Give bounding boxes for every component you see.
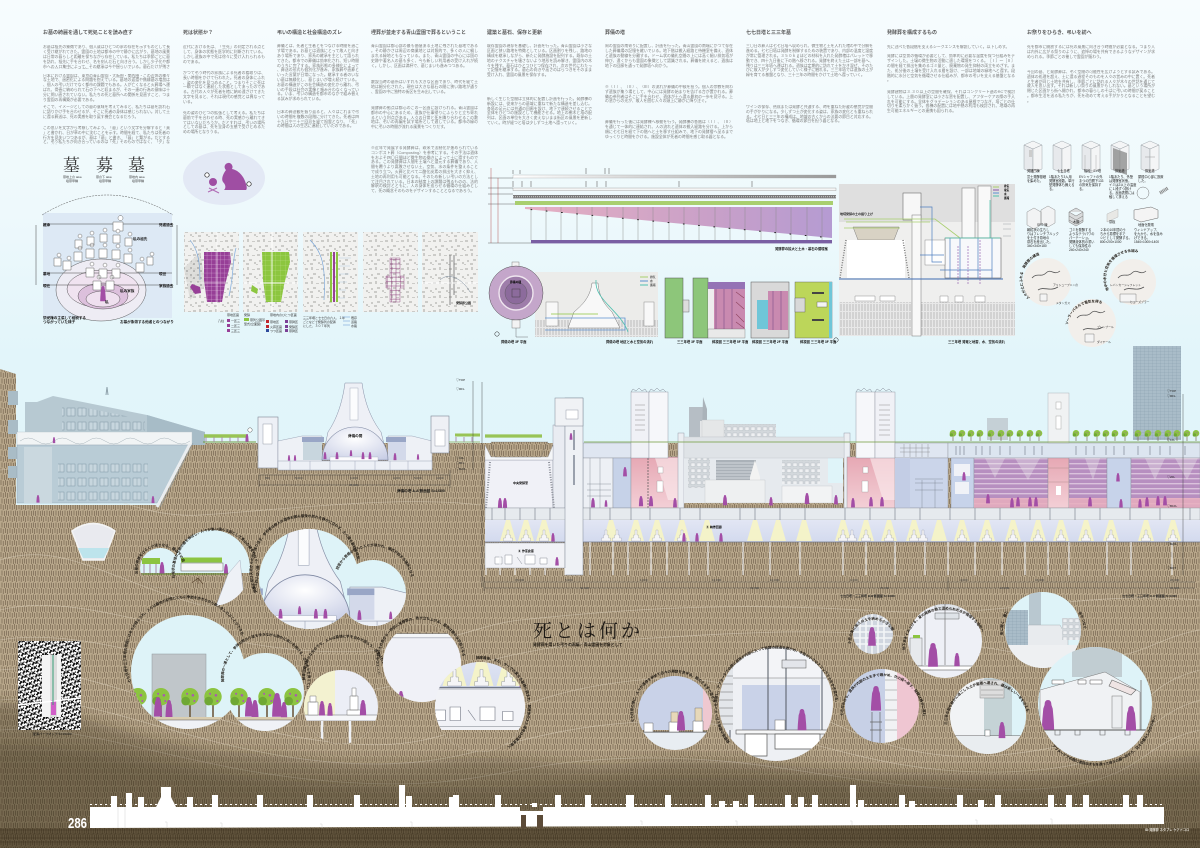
vignette circle 3-4: dome hall: 控室から葬儀の間へと人々が導かれ、儀式が始まる場所となる — [336, 543, 414, 577]
text column: tower of funeral: 周の霊園の南寄りに配置し、計画を行った。青山霊園の南端にかつて存在した葬儀場の記憶を継いでいる。地下階は搬入経路と待機室を備え、遺体と遺族の動線を分離する。ドーム状の儀礼空間の上には高く細い排気塔が伸び、遠くからも霊園の象徴として認識される。葬儀を終えると、遺族は地下の回廊を通って発酵塔へ向かう。 — [605, 44, 733, 68]
vignette circle 5-6: trees and figures: 発酵葬の一連として、参拝の際の小径を歩きながら静かに弔いを続ける。土は木々を育てていく — [220, 632, 311, 689]
section: water and underground flow: 地域発酵の土の掘り上げ — [840, 211, 873, 216]
text column: tower of funeral: 葬儀の塔 — [605, 30, 625, 36]
section: funeral tower: 4,000 — [393, 476, 401, 480]
left: existing building and glass canopy — [8, 387, 205, 507]
main long section: ▽BOT — [1167, 566, 1176, 570]
component icons: tower types: は発酵室状態。 — [1109, 178, 1131, 183]
map legends: 墓地区画 — [227, 312, 239, 317]
map legends: 墓列公園帯 — [250, 317, 265, 322]
section: funeral tower: 45,000 — [349, 483, 359, 487]
vignette circle 5-6: trees and figures: 七七日塔や三三年塔の周囲には木々が植えられ、人々は墓地の記憶とともに季節を歩きながら故人をしのぶことができる。 — [123, 595, 244, 683]
text column: mourning and society: 弔いの構造と社会構造のズレ — [277, 30, 342, 36]
component icons: tower types: した。 — [1138, 178, 1148, 183]
component icons: tower types: 富士発酵基礎 — [1027, 174, 1047, 179]
detail circles: component sketches: ヒューズブラー — [1130, 300, 1150, 304]
vignette circle 1-2: pergola and garden — [134, 528, 260, 606]
detail circles: component sketches — [1019, 248, 1156, 347]
subtitle: 発酵葬を用いた弔りの再編／青山霊園を対象として — [533, 642, 622, 647]
component icons: tower types: を集めた。 — [1027, 178, 1043, 183]
main long section: ▽B1FL — [1167, 504, 1178, 508]
main long section: 1,000 — [640, 578, 648, 582]
text column: open the festival — [1027, 29, 1155, 103]
component icons: tower types: る。 — [1079, 186, 1085, 191]
section: water and underground flow — [839, 184, 1015, 344]
concentric relationship diagram — [36, 195, 177, 324]
main long section: 七七日塔・三三年塔 C-C'断面図 S=1/300 — [1122, 593, 1177, 598]
map legends: 既存 — [351, 315, 357, 320]
text column: 49 days and 33 years: 三〇日の葬人は七七日塔へ収められ、微生物と土を入れた棺の中で分解を進める。七七日塔は発酵を制御するための装置であり、内部の温度と湿度が常に管理される。３５０ｋｇほどの材料を入れた発酵棺はパレットで移動でき、四十九日後に下の階へ移される。発酵を終えた土は一部を墓へ、残りは三三年塔へ運ばれる。遺族は定期的に訪れて土をかき混ぜ、そのたびに故人が少しずつ変化していく様子に触れる。三三年塔では遺族の土が緑を育てる基盤となり、三十三年の時間をかけて土地へ還っていく。 — [746, 44, 873, 77]
main long section: 中央発酵室 — [513, 480, 528, 485]
main long section: ▽1FL — [1167, 438, 1176, 442]
plan: thirty-three year tower — [751, 282, 789, 344]
section: funeral tower: 5,000 — [414, 476, 422, 480]
detail circles: component sketches: ダイヤール — [1097, 340, 1111, 344]
component icons: parts: 朝粒状の生ちし — [1027, 227, 1049, 232]
map legends: 火葬区画 — [270, 324, 282, 329]
component icons: parts: SPS 棟 — [1037, 222, 1048, 227]
plan: lime tower floor — [795, 282, 838, 344]
bottom strip of tower elevations — [90, 785, 1164, 828]
key plan: 配置ハーフマップ S=1/1000 — [33, 731, 72, 736]
concentric relationship diagram: 死者過去 — [159, 222, 174, 227]
text column: architecture and graves: 建築と墓石、保存と更新 — [487, 30, 542, 36]
text column: what forms fermentation burial — [887, 29, 1015, 113]
component icons: parts: 木棚 — [1073, 219, 1079, 224]
component icons: tower types: まつの四層下133 — [1079, 178, 1104, 183]
section: funeral tower: 5,000 — [295, 476, 303, 480]
concentric relationship diagram: 私の祖先 — [133, 236, 148, 241]
main long section: 36,000 — [1170, 586, 1180, 590]
detail circles: component sketches: メタンガス — [1056, 301, 1070, 305]
concentric relationship diagram: お墓が象徴する他者とのつながり — [120, 319, 174, 324]
plan: forty-nine day tower: 斜視図 三三年塔 5F 平面 — [712, 339, 749, 344]
tower airflow section: 排気 — [650, 275, 656, 279]
text column: burial at Aoyama: 青山霊園は都心部の最も価値ある土地に残された墓地である。その静かさは周辺の商業地とは対照的で、多くの人に親しまれる緑地ともなっている。また、青山霊園の中心には国の史跡や著名人の墓も多く、今も新しい利用者の受け入れが続く。しかし、区画は満杯で、墓じまいも進みつつある。 — [371, 44, 478, 68]
text column: is death a state: 死は状態か？ — [183, 30, 213, 36]
vignette circle 8: courtyard: ①・②の中庭の土の底から一時的に発酵葬の、熱が立ち上がる。墓地は静かな中庭となる — [376, 616, 466, 674]
section: water and underground flow: 電気 — [1004, 188, 1010, 192]
kanji comparison — [63, 156, 145, 183]
footer credit: ID:発酵葬 ネタブレ ケアドコロ — [1145, 827, 1189, 832]
section: funeral tower: 6,000 — [350, 476, 358, 480]
component icons: tower types: る。反面表層には — [1109, 190, 1135, 195]
text column: is death a state: 近代における死は、「生死」の判定される点として、身体の状態を医学的に判断されている。しかし遺族の中で死は徐々に受け入れられるものである。 — [183, 45, 265, 64]
pergola on ground — [203, 428, 256, 442]
text column: what forms fermentation burial: 発酵建物は３.３０以上の空間を確保、それはコンクリート造のRCで検討している。上層の発酵室には小さな窓を配置し、アフターケアの際の手入れを可能にする。全体をグラデーションのある屋根でつなぎ、塔ごとの仕切りを柔らかく扱う。各棟の配置には地中熱の利用も検討され、地域の再生可能エネルギーとの連携も図られる。 — [887, 90, 1015, 113]
kanji comparison: 墓 — [128, 156, 145, 175]
vignette circle 15: person at wall: 三三年の間を静かに過ごした土が墓標へ還され、墓は新しい一年を迎える — [944, 681, 1030, 725]
text column: 49 days and 33 years: ワインの保存、熟成または発酵と共通する、時を重ねた貯蔵の感覚が空間の手がかりになる。少しずつ土が変化する姿は、家族の変化とも重ねられる。七七日と三三年の構成は、地域の古くからの法要の節目と対応する。塔は地上と地下をつなぎ、循環の節目を担う器となる。 — [746, 105, 873, 123]
page number: 286 — [68, 815, 87, 832]
tower airflow section: 葬儀の塔 地区と水と空気の流れ — [606, 339, 654, 344]
main long section: 26,000 — [1170, 578, 1180, 582]
component icons: tower types: 型発酵体も備える — [1049, 182, 1074, 187]
map legends: にした、３０７年列 — [303, 323, 330, 328]
main long section: ▽B2FL — [1167, 542, 1178, 546]
component icons: parts: ちから墓標を手で — [1100, 231, 1126, 236]
component icons: parts: 発酵液体的の重い — [1069, 239, 1094, 244]
component icons: parts: ２本の10年間のう — [1100, 227, 1126, 232]
map legends — [218, 312, 357, 333]
text column: tower of funeral: ※（Ⅰ）、（Ⅱ）、（Ⅲ）の流れが葬儀の中核を担う。個人の宗教を問わず遺族が集う場として、中心には発酵の始まりを告げる台が置かれる。葬儀の参列者はそこに手を合わせ、遺体が土へ還る最初の一歩を見守る。上の窓からの光が、故人を囲む人々の頭上に静かに降り注ぐ。 — [605, 85, 733, 103]
component icons: tower types: 屋根中心部に設置 — [1138, 174, 1164, 179]
dimension marks near tower: ▽B2FL — [456, 467, 467, 471]
underground reservoir — [72, 524, 115, 560]
text column: tower of funeral — [605, 29, 733, 139]
vignette circle 1-2: pergola and garden: 石棺状の基壇から藤の棚を伸ばし、人々が集い語らう庭として青山の縁をつなぐ、憩いの小径となる — [171, 528, 260, 590]
map 5: 発酵葬公園 — [456, 300, 471, 305]
text column: grave and death places: お墓の綺麗を通して死処ことを読み直す — [43, 30, 133, 36]
component icons: parts: 墓石を産出した。 — [1027, 239, 1052, 244]
detail circles: component sketches: アリシュープニンの — [1053, 283, 1078, 287]
map legends: 一区三 — [231, 319, 240, 323]
section: water and underground flow: 循環 — [1004, 196, 1010, 200]
map legends: 墓地内のひとつ区画 — [270, 312, 297, 317]
component icons: tower types: 七七日塔 — [1057, 168, 1071, 173]
text column: architecture and graves: 既存霊園の現存を基礎し、計画を行った。青山霊園は小さな区画と狭い路地を特徴としている。区画割りを残し、路地の構成を継承しながら、新たに発酵施設を配列する。既存の土地のテクスチャを壊さないよう地形を読み解き、霊園内の木々を残す。墓石はひとつひとつ保存され、次の世代にわたって記憶を継承する。墓石の向きや高さのばらつきをそのまま受け入れ、霊園の風景を保存する。 — [487, 44, 592, 77]
dimension marks near tower: ▽RFL — [456, 387, 465, 391]
illustration: mourner and skull — [183, 151, 265, 205]
component icons: parts: 340×340×180 — [1027, 244, 1047, 248]
kanji comparison: 墳墓甲種 — [99, 178, 111, 183]
text column: grave and death places: 日本における霊園は、東京の青山霊園・大阪府・関西圏・この近郊の様々な土地で、過密化による問題を抱えている。墓地の返還や無縁墓の増加は、個人の弔いだけでなく都市の課題でもある。人が亡くなると火葬場へ運ばれ、骨壺に納められて石の下へと収まるが、その一連の行為の意味は十分に問い直されていない。私たちの死と墓所への関係を見直すこと、つまり霊園の再構築が必要である。 — [43, 74, 170, 102]
text column: is death a state: かつて弔う時代の家族による死者の看取りは、長い時間をかけて行われた。死者の身体にふれ、姿の変化を見つめること。つまりそこに死は一瞬ではなく連続した状態としてあったのである。古代の人々が死者を棺に納め遠ざけてきた文字を見ると、それは現代の感覚とは異なっている。 — [183, 71, 265, 104]
vignette circle 13: shelf wall: 小窓の奥に故人の土を納める小さな棚 — [848, 616, 894, 644]
main long section: 10,000 — [770, 578, 780, 582]
main long section: 七七日塔・三三年塔 B-B'断面図 S=1/300 — [840, 593, 895, 598]
component icons: parts: りはフレンチブルック — [1027, 231, 1059, 236]
section: funeral tower: 4,000 — [436, 476, 444, 480]
tower plan circle — [489, 262, 543, 344]
map legends: 三三年塔と七七日の六人、１年 — [303, 315, 345, 320]
main long section: 16,000 — [1000, 586, 1010, 590]
vignette circle 16: skyline — [1000, 592, 1087, 668]
component icons: parts: 地面化発電 — [1138, 222, 1155, 227]
concentric relationship diagram: つながっていた様子 — [43, 319, 76, 324]
map legends: 三区三 — [231, 329, 240, 333]
component icons: tower types: 1階あたり3人用 — [1049, 174, 1072, 179]
vignette circle 8: courtyard — [376, 616, 466, 702]
main long section: 27,000 — [880, 586, 890, 590]
component icons: tower types: 1階あたり、外壁 — [1109, 174, 1134, 179]
vignette circle 14: mechanical room: 地下水をくみ上げる。夏の発酵の熱で温められた水が循環する場所へ — [902, 606, 983, 650]
text column: burial at Aoyama: 敷設当時の墓所はいずれも大きな区画であり、時代を経て土地は細分化された。現在は大きな墓石の間に狭い路地が通り、霊園の中に独特の街区を生み出している。 — [371, 80, 478, 94]
component icons: parts — [1027, 187, 1168, 252]
concentric relationship diagram: 墓地 — [43, 271, 51, 276]
text column: what forms fermentation burial: 発酵葬を構成するもの — [887, 30, 937, 36]
kanji comparison: 墓地内 taka — [129, 174, 145, 179]
vignette circle 17: facades — [1038, 647, 1156, 766]
vignette circle 14: mechanical room — [902, 604, 983, 678]
timeline diagram: tower expansion — [488, 168, 836, 251]
vignette circle 9: gallery and storage: 回廊最後。また、タイプの異なる墓標に囲まれ、発酵後の土と遺骨は作業倉庫へ — [476, 656, 532, 748]
main long section — [484, 346, 1200, 598]
title: 死とは何か — [533, 620, 643, 642]
timeline diagram: tower expansion: 発酵葬の拡大と土木・墓石の循環案 — [775, 246, 828, 251]
component icons: tower types: 換気塔 — [1145, 168, 1155, 173]
main long section: 5,000 — [565, 578, 573, 582]
plan: forty-nine day tower — [665, 278, 749, 344]
map legends: 八柱 — [218, 318, 224, 323]
component icons: tower types: の排気を保持す — [1079, 182, 1101, 187]
main long section: 15,000 — [515, 578, 525, 582]
text column: what forms fermentation burial: 発酵には空気の循環が必要として、効率的に必要な温度を保つ仕組みをデザインした。土壌の微生物の活動に適した環境をつくる。［Ⅰ］〜［Ⅱ］の間を経て排出を集めるゴミ量と、廃棄物の発生抑制の両立をめざす。また、処分後の土壌を受け入れる層を設け、一部は地域の緑地へと還す。段階的に水分と空気を循環させる仕組みが、都市の弔いを支える基盤となる。 — [887, 54, 1015, 82]
map legends: 二区三 — [231, 324, 240, 328]
main long section: ▽2FL — [1167, 475, 1176, 479]
text column: open the festival: 今回の墓、と発酵葬は、弔く空間の可能性を広げようとする試みである。遺体の処理を超え、土に還る過程そのものを人々の営みの中に置く。死者と生者が同じ土地を共有し、季節ごとに訪れる人々が木々の世話を通じて故人を思い出す。それは新しい祭りの風景かもしれない。墓という場所が閉じた区画から街へ開かれ、都市の暮らしのそばに弔いの時間が戻ること。都市生活を送る私たちが、死を改めて考える手がかりとなることを望む。 — [1027, 70, 1155, 103]
vignette circle 5-6: trees and figures — [123, 595, 311, 731]
text column: is death a state: 死の姿のひとつの拡張として考える。私たちは墓前で手を合わせる時、死の実感から離れてきてはいないだろうか。だとすれば、弔いの場所としての墓は、死を全身の五感で受けとめるための場所となりうる。 — [183, 111, 265, 134]
component icons: tower types: 発酵室段数。単行 — [1049, 178, 1075, 183]
dimension marks near tower: ▽TOP — [456, 378, 465, 382]
map legends: つつ区画 — [270, 328, 282, 333]
component icons: tower types: に１段ずつ設け — [1109, 186, 1131, 191]
map 1 — [184, 232, 239, 312]
text column: architecture and graves: 新しく生じた空間は立体的に配置し計画を行った。発酵棟の新設には、従来からの墓域に重ねて新たな構造を差し込む。各塔の足元には共通の回廊を設け、地下で連続させることで全体をひとつの施設として機能させる。地上の樹木と塔の配列は、区画の単位を大きく変えないまま街区の風景を更新していく。時が経つと塔は少しずつ土地へ還っていく。 — [487, 97, 592, 125]
concentric relationship diagram: 現世 — [159, 271, 167, 276]
vignette circle 13: shelf wall — [848, 614, 894, 654]
component icons: parts: ゴミを発酵する — [1069, 227, 1091, 232]
detail circles: component sketches: ソーラーパネルで電気を得る — [1066, 300, 1102, 324]
map legends: 道路 — [351, 319, 357, 324]
text column: open the festival: 死を都市に開放するには死の風景に向き合う時間が必要となる。つまり人は内外に広がる祭りのように、追悼の場を共有できるようなデザインが求められる。季節ごとの催しで霊園が賑わう。 — [1027, 45, 1155, 59]
ground: soil section — [0, 369, 1200, 848]
map legends: 発酵 — [244, 312, 250, 317]
detail circles: component sketches: レバンカーシャフレット — [1110, 283, 1141, 287]
kanji comparison: 墓 — [63, 156, 80, 175]
text column: mourning and society: 葬儀とは、死者と生者とをつなげる時間を過ごす場である。お墓とは遺族にとって故人と向きあう場所であり、家系の継承を主として語られてきた。都市での葬儀は効率化され、短い時間のうちに完了する。家族形態の多様化によって、葬送の形式も個別化が進み、家族葬や直葬といった言葉が日常になった。継承する者のいない墓は無縁化し、墓じまいが増え続けている。お墓の構造がこの社会構造の変化から離れ、弔いの手段は社会の実像と噛み合わなくなっている。いま、弔いの構造を都市のなかで組み替える試みが求められている。 — [277, 44, 359, 101]
section: funeral tower: 葬儀の塔 A-A'断面図 S=1/300 — [397, 488, 445, 493]
key plan — [18, 641, 81, 736]
vignette circle 12: tower wall — [840, 669, 926, 743]
vignette circle 3-4: dome hall: 葬儀の間は天窓からの光が降り注ぎ、参列者は故人の遺体を囲み最後の別れを静かに交わす。土へ還る最初の時間。 — [249, 514, 360, 593]
tower airflow section — [535, 272, 658, 344]
map 3 — [303, 232, 358, 312]
vignette circle 7: gravestones: 納骨回廊の静かな光の下で、人々は墓標に手を合わせ語らう。遺骨は石の下に — [302, 634, 384, 680]
main long section: 16,000 — [1035, 578, 1045, 582]
main long section: ▽RFL — [1167, 394, 1176, 398]
concentric relationship diagram: 私 — [105, 299, 109, 304]
tower airflow section: 循環 — [650, 283, 656, 287]
map legends: 墓碑区 — [289, 328, 298, 333]
plan: lime tower floor: 斜視図 三三年塔 3F 平面 — [800, 339, 837, 344]
map legends: 墓碑区 — [289, 319, 298, 324]
component icons: parts: ようなテラパワの — [1069, 231, 1094, 236]
map legends: 型式(立面図) — [244, 321, 261, 326]
text column: burial at Aoyama: 埋葬が並走する青山霊園で葬るということ — [371, 30, 466, 36]
component icons: tower types: 階段・EV塔 — [1084, 168, 1102, 173]
vignette circle 10: tending: 七七日塔の壇に、人々が遺体を納めて日々の発酵を見守る。棚の土を手で混ぜる — [630, 670, 716, 722]
vignette circle 9: gallery and storage — [435, 656, 532, 752]
main long section: ▽TOP — [1167, 389, 1176, 393]
map legends: 水路 — [351, 323, 357, 328]
component icons: parts: を九から、水を汲み — [1134, 231, 1163, 236]
kanji comparison: 墳墓甲種 — [132, 178, 144, 183]
detail circles: component sketches: 地中の水分と空気を循環させる仕組み — [1103, 248, 1138, 291]
main long section: ③ 納骨回廊 — [706, 524, 722, 529]
vignette circle 17: facades: アフターケアの際に遺族はまちを通って自らの墓へ向かう、日々の暮らしの中の弔い。 — [1052, 715, 1156, 766]
text column: grave and death places — [43, 29, 170, 145]
concentric relationship diagram: 祭祀権の主張して相続する — [43, 315, 86, 320]
tower plan circle: 葬儀の塔 3F 平面 — [501, 339, 527, 344]
component icons: parts: 240×240×240 — [1069, 248, 1089, 252]
kanji comparison: 募 — [96, 156, 113, 175]
map legends: 発酵区 — [289, 324, 298, 329]
main long section: 42,000 — [580, 586, 590, 590]
concentric relationship diagram: 私の家族 — [120, 288, 135, 293]
map 2 — [243, 232, 298, 312]
vignette circle 3-4: dome hall — [249, 514, 414, 629]
component icons: tower types: る。 — [1049, 186, 1055, 191]
concentric relationship diagram: 現在 — [43, 283, 51, 288]
dimension marks near tower: ▽BFL — [456, 461, 465, 465]
component icons: tower types: イミは2以上の温度 — [1109, 182, 1137, 187]
kanji comparison: 墳墓甲種 — [66, 178, 78, 183]
component icons: tower types — [1024, 141, 1164, 199]
component icons: parts: 墓板 — [1109, 219, 1116, 224]
component icons: parts: しても保持性の — [1069, 243, 1091, 248]
vignette circle 15: person at wall — [944, 678, 1030, 754]
vignette circle 12: tower wall: 七七日ののち、遺族が内部の土を手で確かめ、次の段へ移す。発酵は静かに進む — [840, 673, 926, 716]
text column: open the festival: お祭りをひらき、弔いを紡へ — [1027, 30, 1092, 36]
section: funeral tower: 800 — [265, 476, 270, 480]
section: funeral tower: 葬儀の間 — [348, 433, 363, 438]
dimension marks near tower: ▽1FL — [456, 456, 465, 460]
text column: 49 days and 33 years: 七七日塔と三三年墓 — [746, 30, 791, 36]
text column: burial at Aoyama: ※近年で発展する発酵葬は、欧米で法制化が進められているコンポスト葬（Composting）を参考にする。その手法は遺体をおよそ四〇日間ほど微生物の働きによって土に還すものである。この発酵葬は人間を土壌へと還元する葬儀であり、人間を覆うより腐敗させない土、空気、水の条件を整えることで成り立つ。火葬と比べて二酸化炭素の排出を大きく抑え、土地の再利用も可能となる。そのため新しい弔いの方法として注目されている。日本の制度上の課題は残るものの、法的解釈の検討とともに、人の身体を巡らせる循環の仕組みとして、死の概念そのものをデザインすることとなるであろう。 — [371, 146, 478, 193]
component icons: parts: 800×200×1000 — [1100, 240, 1122, 244]
component icons: parts: パーテーショ。 — [1069, 235, 1091, 240]
text column: burial at Aoyama — [371, 29, 478, 193]
main long section: 13,000 — [750, 586, 760, 590]
main long section: 13,000 — [712, 578, 722, 582]
tower plan circle: 葬儀の間 — [510, 280, 521, 284]
dimension marks near tower — [456, 378, 482, 587]
tower airflow section: 水 — [650, 279, 653, 283]
component icons: tower types: 発酵門棟 — [1027, 168, 1041, 173]
section: water and underground flow: 三三年塔 発電と地雷、水、空気の流れ — [948, 339, 1006, 344]
map 4 — [363, 232, 418, 312]
text column: is death a state — [183, 29, 265, 134]
concentric relationship diagram: 継承 — [43, 222, 51, 227]
section: water and underground flow: 水 — [1004, 192, 1007, 196]
text column: grave and death places: そこで、イメージとしての墓の意味を考えてみると、私たちは墓を訪れ石に語りかけ手を合わせるが、そこに死者の身体は感じられない。対して土に還る葬送は、死の実感を取り戻す機会となるだろう。 — [43, 105, 170, 119]
component icons: tower types: EVシャフトの外 — [1079, 174, 1103, 179]
map legends: ごとなどで発酵列の配置 — [303, 319, 336, 324]
detail circles: component sketches: 人々が土にふれる 発酵層の構造 — [1019, 252, 1040, 299]
concentric relationship diagram: 家族過去 — [159, 283, 174, 288]
text column: mourning and society: 日本の葬送観を振り返ると、人々はこれまで弔いの時間を複数の段階に分けてきた。死者は四十九日や三十三回忌を経て祖霊となり、「死」の時間は人の生活に連続していたのである。 — [277, 110, 359, 128]
main long section: ⑥ 作業倉庫 — [518, 548, 534, 553]
component icons: parts: 1540×1000×1400 — [1134, 240, 1159, 244]
component icons: parts: ウィンドアップ、 — [1134, 227, 1159, 232]
vignette circle 1-2: pergola and garden: お墓の周縁をひらく小径となる、藤の下の庭 — [134, 543, 185, 574]
component icons: parts: げできる。 — [1134, 235, 1150, 240]
text column: mourning and society — [277, 29, 359, 128]
detail circles: component sketches: ブレンプール — [1097, 325, 1114, 329]
text column: what forms fermentation burial: 先に述べた各段階を支えるシークエンスを解説していく。以下しめす。 — [887, 45, 1009, 49]
component icons: parts: シビとして発酵する。 — [1100, 235, 1132, 240]
text column: burial at Aoyama: 発酵葬の拠点は都心のこの一区画に設けられる。青山霊園は都市の中心にあるため、遺族が仕事帰りにふらりと立ち寄れるという利点がある。人々の日常と死を隣り合わせるこの敷地は、弔いの再編を試す場所として適している。都市の緑の中に弔いの時間が流れる風景をつくりだす。 — [371, 106, 478, 129]
map 5 — [422, 232, 478, 312]
vignette circle 7: gravestones — [302, 634, 384, 744]
kanji comparison: 墓地上の taka — [63, 174, 82, 179]
component icons: tower types: 触して排える — [1109, 194, 1128, 199]
main long section: 1,000 — [850, 578, 858, 582]
vignette circle 10: tending — [630, 670, 716, 750]
plan: forty-nine day tower: 三三年塔 3F 平面 — [677, 339, 703, 344]
main long section: 4,000 — [960, 578, 968, 582]
vignette circle 11: fermentation room: 発酵塔の棚板とカーテンを開閉し、アフターケアの際に遺族が内部に入って発酵の経過を確かめ、木製の小さなスコップで土をかき混ぜる。 — [714, 645, 838, 744]
component icons: tower types: 排気塔 — [1115, 168, 1125, 173]
map legends: 墓地区 — [270, 319, 279, 324]
text column: 49 days and 33 years — [746, 29, 873, 123]
plan: thirty-three year tower: 斜視図 三三年塔 2F 平面 — [752, 339, 789, 344]
section: funeral tower — [258, 383, 480, 493]
vignette circle 16: skyline: 街に開く 墓と街をつなぐ — [1000, 611, 1087, 635]
text column: tower of funeral: 葬儀を行った後には発酵棟へ移動を行う。発酵棟の各階は（Ⅰ）、（Ⅱ）を通じて一体的に連結され、人の流れと遺体の搬入経路を分ける。上から順に七七日を経て下の階へと土を移す仕組みで、地下の発酵層へ至るまでゆっくりと時間をかける。施設全体が死者の時間を感じ取る器となる。 — [605, 120, 733, 139]
section: water and underground flow: 排気 — [1004, 184, 1010, 188]
kanji comparison: 墓の下 taka — [96, 174, 112, 179]
text column: architecture and graves — [487, 29, 592, 125]
component icons: parts: を土付き墓地の — [1027, 235, 1049, 240]
